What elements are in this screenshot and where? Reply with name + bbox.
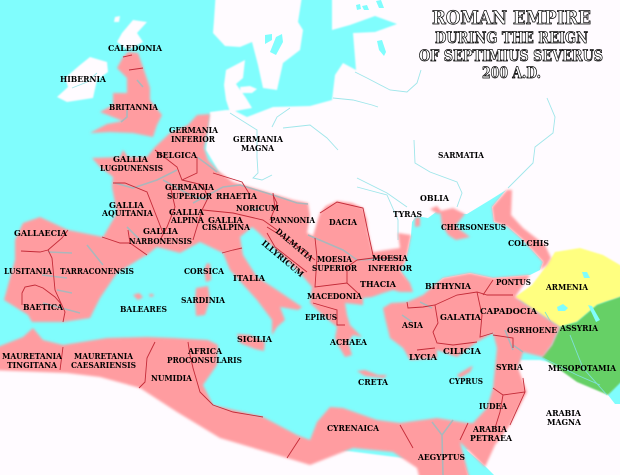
label: Sicilia: SICILIA xyxy=(237,334,273,344)
label: Chersonesus: CHERSONESUS xyxy=(441,222,506,232)
label: Asia: ASIA xyxy=(401,320,424,330)
label: Gallia Alpina: GALLIA xyxy=(169,207,205,217)
label: Cyrenaica: CYRENAICA xyxy=(327,423,380,433)
label: Tyras: TYRAS xyxy=(393,209,422,219)
label: Africa Proconsularis: AFRICA xyxy=(187,346,223,356)
label: Lycia: LYCIA xyxy=(409,352,438,362)
label: Germania Magna xyxy=(233,134,284,153)
label: Syria: SYRIA xyxy=(496,362,524,372)
label: Rhaetia: RHAETIA xyxy=(216,191,258,201)
label: Germania Superior xyxy=(165,182,215,201)
label: Gallia Aquitania: AQUITANIA xyxy=(101,208,154,218)
label: Numidia: NUMIDIA xyxy=(151,373,193,383)
label: Arabia Magna xyxy=(545,408,582,427)
label: Thracia: THACIA xyxy=(360,279,397,289)
label: Pannonia: PANNONIA xyxy=(270,215,316,225)
label: Gallia Lugdunensis: GALLIA xyxy=(113,154,149,164)
label: Moesia Inferior: INFERIOR xyxy=(368,263,412,273)
label: Mauretania Tingitana xyxy=(2,351,63,370)
label: Epirus: EPIRUS xyxy=(305,312,337,322)
label: Arabia Petraea xyxy=(470,424,513,443)
label: Mauretania Tingitana: MAURETANIA xyxy=(2,351,63,361)
label: Germania Inferior: INFERIOR xyxy=(171,134,215,144)
label: Capadocia: CAPADOCIA xyxy=(480,306,538,316)
label: Galatia: GALATIA xyxy=(440,312,482,322)
label: Gallia Aquitania xyxy=(101,200,154,218)
label: Germania Inferior xyxy=(169,125,219,144)
label: Arabia Magna: MAGNA xyxy=(547,417,582,427)
label: Italia: ITALIA xyxy=(233,273,266,283)
label: Aegyptus: AEGYPTUS xyxy=(417,452,465,462)
label: Gallia Aquitania: GALLIA xyxy=(109,200,145,210)
label: Africa Proconsularis: PROCONSULARIS xyxy=(167,355,242,365)
label: Sardinia: SARDINIA xyxy=(181,295,226,305)
label: Mauretania Tingitana: TINGITANA xyxy=(7,360,58,370)
label: Tarraconensis: TARRACONENSIS xyxy=(60,266,134,276)
label: Germania Magna: GERMANIA xyxy=(233,134,284,144)
label: Gallia Lugdunensis: LUGDUNENSIS xyxy=(100,163,163,173)
label: Pontus: PONTUS xyxy=(496,277,531,287)
label: Arabia Petraea: PETRAEA xyxy=(470,433,513,443)
label: Illyricum: ILLYRICUM xyxy=(260,238,306,279)
label: Gallia Cisalpina xyxy=(202,215,251,232)
label: Mauretania Caesariensis: MAURETANIA xyxy=(74,351,134,361)
lakes and rivers in Parthia xyxy=(543,272,607,395)
Parthia: Armenia xyxy=(515,248,620,327)
provincial borders xyxy=(21,55,525,458)
label: Lusitania: LUSITANIA xyxy=(4,266,53,276)
label: Moesia Inferior xyxy=(368,253,412,273)
label: Hibernia: HIBERNIA xyxy=(60,74,107,84)
label: Moesia Superior: MOESIA xyxy=(317,254,353,264)
label: Macedonia: MACEDONIA xyxy=(307,291,363,301)
label: Noricum: NORICUM xyxy=(236,203,279,213)
title xyxy=(419,7,603,82)
label: Bithynia: BITHYNIA xyxy=(425,281,472,291)
label: Gallia Alpina xyxy=(169,207,205,225)
label: Gallia Alpina: ALPINA xyxy=(170,215,205,225)
lakes and gulfs xyxy=(265,0,620,475)
label: Germania Superior: SUPERIOR xyxy=(167,191,212,201)
label: Germania Inferior: GERMANIA xyxy=(169,125,219,135)
label: Caledonia: CALEDONIA xyxy=(108,43,163,53)
label: Gallia Cisalpina: GALLIA xyxy=(208,215,244,225)
label: Gallia Cisalpina: CISALPINA xyxy=(202,222,251,232)
title: 200 A.D. xyxy=(482,63,541,82)
label: Germania Superior: GERMANIA xyxy=(165,182,215,192)
label: Africa Proconsularis xyxy=(167,346,242,365)
label: Assyria: ASSYRIA xyxy=(559,323,599,333)
label: Colchis: COLCHIS xyxy=(508,238,549,248)
label: Baleares: BALEARES xyxy=(120,304,167,314)
label: Cyprus: CYPRUS xyxy=(449,376,483,386)
label: Dacia: DACIA xyxy=(329,217,358,227)
label: Arabia Petraea: ARABIA xyxy=(472,424,508,434)
label: Gallia Narbonensis xyxy=(129,226,192,246)
label: Sarmatia: SARMATIA xyxy=(438,150,485,160)
rivers inside the empire xyxy=(42,80,523,475)
title: DURING THE REIGN xyxy=(435,28,588,47)
label: Dalmatia: DALMATIA xyxy=(274,226,316,264)
label: Gallia Narbonensis: NARBONENSIS xyxy=(129,236,192,246)
label: Mauretania Caesariensis xyxy=(71,351,136,370)
label: Corsica: CORSICA xyxy=(184,266,225,276)
label: Iudea: IUDEA xyxy=(479,401,508,411)
label: Belgica: BELGICA xyxy=(156,150,198,160)
label: Gallia Lugdunensis xyxy=(100,154,163,173)
label: Mesopotamia: MESOPOTAMIA xyxy=(548,363,617,373)
label: Mauretania Caesariensis: CAESARIENSIS xyxy=(71,360,136,370)
Parthia: Assyria and Mesopotamia xyxy=(542,295,620,395)
label: Armenia: ARMENIA xyxy=(545,282,589,292)
rivers on unconquered land xyxy=(72,70,555,240)
label: Baetica: BAETICA xyxy=(23,302,64,312)
label: Creta: CRETA xyxy=(358,377,389,387)
label: Germania Magna: MAGNA xyxy=(241,143,275,153)
label: Osrhoene: OSRHOENE xyxy=(507,325,557,335)
label: Achaea: ACHAEA xyxy=(329,337,368,347)
label: Britannia: BRITANNIA xyxy=(109,102,159,112)
label: Gallia Narbonensis: GALLIA xyxy=(143,226,179,236)
label: Gallaecia: GALLAECIA xyxy=(14,228,68,238)
title: ROMAN EMPIRE xyxy=(432,7,591,29)
label: Oblia: OBLIA xyxy=(420,193,450,203)
label: Moesia Superior xyxy=(312,254,357,273)
label: Moesia Superior: SUPERIOR xyxy=(312,263,357,273)
label: Arabia Magna: ARABIA xyxy=(545,408,582,418)
label: Moesia Inferior: MOESIA xyxy=(372,253,409,263)
label: Cilicia: CILICIA xyxy=(443,346,482,356)
